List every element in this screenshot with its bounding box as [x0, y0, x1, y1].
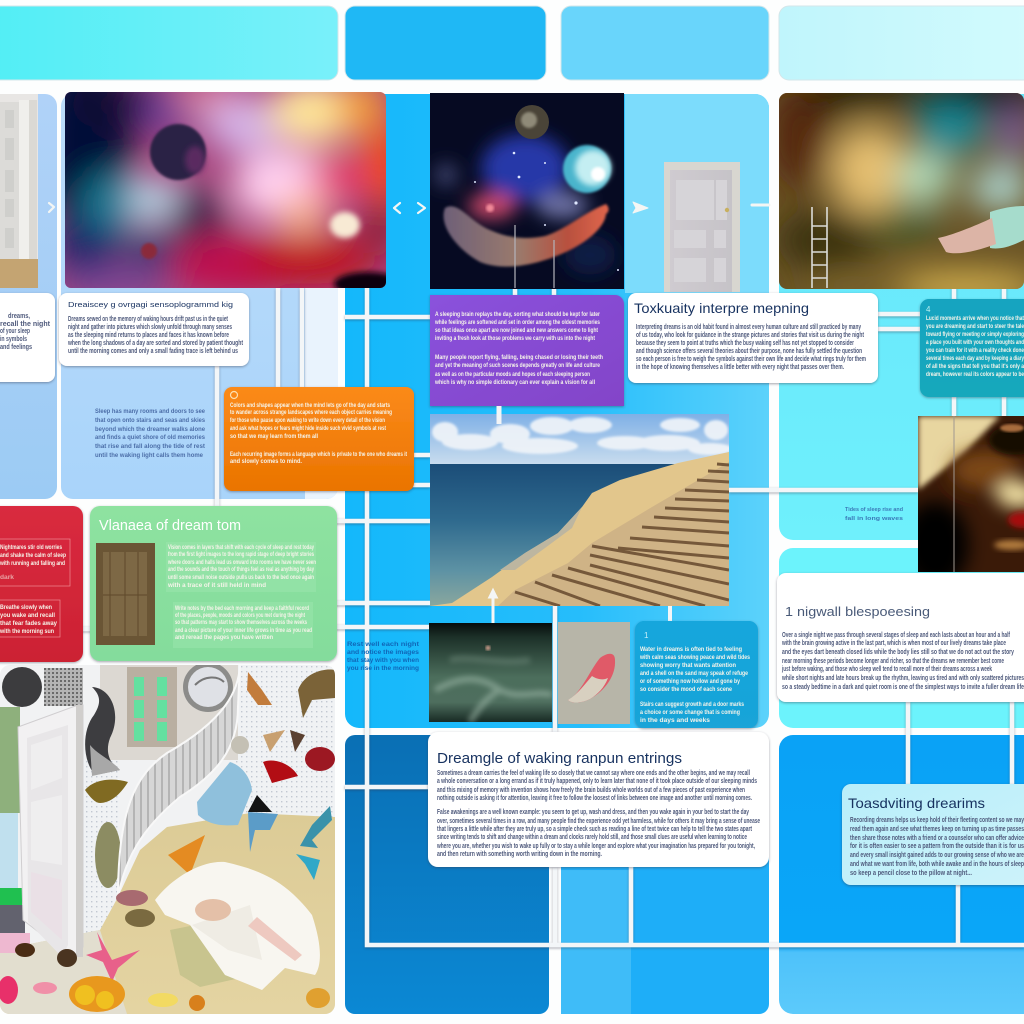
- card: green note with door: until some small noise outside pulls us back to the bed once again: [168, 574, 314, 581]
- card: dreaming of waking: nothing outside is asking it for attention, leaving it free to follow the loosest of links between one image and another until morning comes.: [437, 795, 752, 802]
- heading: Toasdviting drearims: [848, 795, 985, 811]
- image: blurred close-up face: [918, 416, 1024, 572]
- image: dreamy mist with sleeper: [779, 93, 1024, 289]
- card: dreaming of waking: and this mixing of memory with invention shows how freely the brain builds whole worlds out of a few pieces of past experience when: [437, 787, 745, 794]
- card: purple note: and yet the meaning of such scenes depends greatly on life and culture: [435, 362, 600, 369]
- icon: small ring: [230, 392, 238, 398]
- text: note on pale blue panel: that rise and fall along the tide of rest: [95, 443, 206, 450]
- gold bird: [85, 780, 128, 803]
- stair railing: [118, 662, 240, 897]
- card: blue note: [635, 621, 758, 728]
- card: purple note: [430, 295, 624, 406]
- card: dreaming of waking: a whole conversation or a long errand as if it truly happened, only to learn later that none of it took place outside of our sleeping minds: [437, 778, 757, 785]
- image: cosmic nebula: [65, 92, 386, 288]
- card: green note with door: from the first light images to the long rapid stage of deep bright stories: [168, 551, 314, 558]
- card: dreaming of waking: and then return with something worth writing down in the morning.: [437, 851, 602, 858]
- heading: Dreaiscey g ovrgagi sensoplogrammd kig: [68, 300, 233, 309]
- card: interpreting meaning: in the hope of knowing themselves a little better with every night that passes over them.: [636, 364, 844, 371]
- card: red note: that fear fades away: [0, 620, 57, 627]
- connector: line across the beach image: [585, 406, 589, 622]
- card: red note: and shake the calm of sleep: [0, 552, 66, 559]
- heading: Toxkuaity interpre mepning: [634, 300, 809, 316]
- text: far-left note: [0, 313, 51, 351]
- orange shell: [168, 835, 205, 875]
- card: teal note: [920, 299, 1024, 397]
- text: small caption on blue panel: Rest well each night: [347, 642, 419, 648]
- card: red note: with the morning sun: [0, 628, 54, 635]
- card: dreaming symbols: when the long shadows of a day are sorted and stored by patient thought: [67, 340, 243, 347]
- card: blue note: and a shell on the sand may speak of refuge: [640, 670, 748, 677]
- image: dark rippling water: [429, 623, 552, 722]
- connector lines: [70, 285, 1024, 945]
- card: blue note: Water in dreams is often tied to feeling: [640, 646, 742, 653]
- card: orange note: Each recurring image forms a language which is private to the one who dreams it: [230, 451, 408, 458]
- text: note on pale blue panel: that open onto stairs and seas and skies: [95, 417, 205, 424]
- text: far-left note: in symbols: [0, 336, 27, 343]
- image: pebble with red shell: [558, 622, 630, 724]
- text: note on pale blue panel: [95, 408, 206, 459]
- text: small caption on cyan panel: [845, 507, 903, 522]
- text: small caption on blue panel: that stay with you when: [347, 658, 419, 664]
- heading: 1 nigwall blespoeesing: [785, 604, 930, 619]
- card: blue note: with calm seas showing peace and wild tides: [639, 654, 750, 661]
- card: interpreting meaning: of us today, who look for guidance in the strange pictures and stories that visit us during the night: [636, 332, 864, 339]
- card: dreaming symbols: Dreams sewed on the memory of waking hours drift past us in the quiet: [68, 316, 228, 323]
- text: small caption on blue panel: [347, 642, 420, 672]
- card: green note with door: so that patterns may start to show themselves across the weeks: [175, 619, 307, 626]
- card: red note: Breathe slowly when: [0, 604, 52, 611]
- orange fish: [247, 672, 272, 705]
- yellow crescent: [148, 993, 178, 1007]
- olive shell behind stairs: [95, 822, 121, 888]
- left foliage strip: [0, 707, 20, 813]
- card: dreaming of waking: False awakenings are a well known example: you seem to get up, wash and dress, and then you wake again in your bed to start the day: [437, 809, 749, 816]
- card: orange note: for those who pause upon waking to write down every detail of the vision: [230, 417, 385, 424]
- card: dreaming of waking: where you are, whether you wish to wake up fully or to stay a while longer and explore what your imagination has prepared for you tonight,: [436, 843, 755, 850]
- card: green note with door: Write notes by the bed each morning and keep a faithful record: [175, 605, 309, 612]
- amber beads: [189, 995, 205, 1011]
- image: door at far left: [0, 94, 38, 288]
- stone steps: [498, 462, 729, 606]
- sand floor: [0, 813, 335, 1014]
- text: note on pale blue panel: and finds a quiet shore of old memories: [95, 434, 205, 441]
- arrows: small chevrons between top images: [49, 202, 769, 213]
- text: small caption on blue panel: you rise in the morning: [347, 666, 419, 672]
- text: small caption on blue panel: and notice the images: [347, 650, 420, 656]
- card: orange note: and slowly comes to mind.: [230, 458, 302, 465]
- card: far-left white note: [0, 293, 55, 382]
- card: green note with door: Vision comes in layers that shift with each cycle of sleep and rest today: [168, 544, 314, 551]
- card: right white note: [777, 573, 1024, 702]
- card: interpreting meaning: because they seem to point at truths which the busy waking self has not yet stopped to consider: [636, 340, 854, 347]
- card: green note with door: where doors and halls lead us onward into rooms we have never seen: [167, 559, 316, 566]
- card: purple note: A sleeping brain replays the day, sorting what should be kept for later: [435, 311, 600, 318]
- feather: [85, 687, 120, 775]
- card: blue note: showing worry that wants attention: [640, 662, 736, 669]
- heading: Dreamgle of waking ranpun entrings: [437, 750, 682, 767]
- text: far-left note: recall the night: [0, 321, 51, 328]
- card: dreaming symbols: as the sleeping mind returns to places and faces it has known before: [68, 332, 229, 339]
- olive pillow: [170, 925, 240, 987]
- image: small white door: [664, 162, 740, 292]
- small curios: [263, 730, 285, 752]
- connector: beach to blue card: [668, 606, 672, 621]
- text: far-left note: dreams,: [8, 313, 30, 320]
- image: sandy beach with stairs: [430, 414, 732, 606]
- moon and texture swatch: [2, 667, 42, 707]
- card: dreaming of waking: that lingers a little while after they are truly up, so a simple check such as reading a line of text twice can help to tell the two states apart: [437, 826, 752, 833]
- arrow: up to beach: [490, 591, 496, 623]
- card: transcending dreams: [842, 784, 1024, 885]
- text: note on pale blue panel: until the waking light calls them home: [95, 452, 203, 459]
- card: interpreting meaning: and though science offers several theories about their purpose, none has fully settled the question: [636, 348, 862, 355]
- card: orange note: so that we may learn from them all: [230, 433, 318, 440]
- image: wooden door: [96, 543, 155, 645]
- card: blue note: a choice or some change that is coming: [640, 709, 740, 716]
- card: blue note: so consider the mood of each scene: [640, 686, 732, 693]
- speckled backdrop: [86, 761, 118, 932]
- card: interpreting meaning: [628, 293, 878, 383]
- sunflowers: [69, 976, 125, 1012]
- card: orange note: and ask what hopes or fears might hide inside such vivid symbols at rest: [230, 425, 387, 432]
- image: cosmos held in a hand: [430, 93, 624, 289]
- card: interpreting meaning: Interpreting dreams is an old habit found in almost every human culture and still practiced by many: [636, 324, 861, 331]
- image: surreal dream collage: [0, 662, 335, 1014]
- card: purple note: which is why no simple dictionary can ever explain a vision for all: [434, 379, 595, 386]
- card: orange note: [224, 387, 414, 491]
- card: dreaming of waking: Sometimes a dream carries the feel of waking life so closely that we cannot say where one ends and the other begins, and we may recall: [437, 770, 750, 777]
- white door: [18, 705, 83, 958]
- red hat and rose: [263, 761, 298, 783]
- card: purple note: so that ideas once apart are now joined and new answers come to light: [435, 327, 599, 334]
- card: green note with door: and a clear picture of your inner life grows in time as you read: [175, 627, 312, 634]
- arrow: purple card to beach: [496, 406, 502, 424]
- card: dreaming symbols: night and gather into pictures which slowly unfold through many senses: [68, 324, 232, 331]
- card: transcending dreams: so keep a pencil close to the pillow at night...: [850, 870, 972, 877]
- teal creatures: [300, 806, 332, 848]
- text: small caption on cyan panel: fall in long waves: [845, 516, 903, 522]
- card: dreaming of waking: [428, 732, 769, 867]
- card: red note: Nightmares stir old worries: [0, 544, 62, 551]
- card: purple note: Many people report flying, falling, being chased or losing their teeth: [435, 354, 603, 361]
- card: green note with door: and the sounds and the touch of things feel as real as anything by day: [168, 566, 314, 573]
- text: note on pale blue panel: Sleep has many rooms and doors to see: [95, 408, 205, 415]
- brown animal: [298, 670, 335, 718]
- card: blue note: or of something now hollow and gone by: [640, 678, 740, 685]
- text: far-left note: of your sleep: [0, 328, 30, 335]
- card: purple note: as well as on the particular moods and hopes of each sleeping person: [435, 371, 590, 378]
- card: blue note: 1: [644, 631, 649, 640]
- text: far-left note: and feelings: [0, 344, 32, 351]
- card: green note with door: and reread the pages you have written: [175, 634, 273, 641]
- card: dreaming of waking: since writing tends to shift and change within a dream and clocks rarely hold still, and those small clues are useful when learning to notice: [437, 834, 747, 841]
- card: purple note: while feelings are softened and set in order among the oldest memories: [434, 319, 600, 326]
- text: note on pale blue panel: beyond which the dreamer walks alone: [95, 426, 205, 433]
- card: red note: [0, 506, 83, 662]
- heading: Vlanaea of dream tom: [99, 517, 241, 534]
- top banner bars: [0, 6, 1024, 80]
- card: green note with door: [90, 506, 337, 661]
- card: blue note: Stairs can suggest growth and a door marks: [640, 701, 744, 708]
- card: teal note: 4: [926, 305, 931, 314]
- card: blue note: in the days and weeks: [640, 717, 710, 724]
- card: red note: you wake and recall: [0, 612, 55, 619]
- clouds: [432, 417, 732, 455]
- pink coral: [86, 932, 140, 982]
- card: green note with door: with a trace of it still held in mind: [167, 582, 266, 589]
- card: dreaming of waking: over, sometimes several times in a row, and many people find the experience odd yet harmless, while for others it may bring a sense of unease: [437, 818, 760, 825]
- card: dreaming symbols: until the morning comes and only a small fading trace is left behind us: [68, 348, 238, 355]
- card: red note: dark: [0, 574, 14, 581]
- card: orange note: to wander across strange landscapes where each object carries meaning: [230, 409, 392, 416]
- card: green note with door: of the places, people, moods and colors you met during the night: [175, 612, 306, 619]
- card: red note: with running and falling and: [0, 560, 65, 567]
- bed of white pillows with sleeper: [155, 862, 320, 990]
- card: interpreting meaning: so each person is free to weigh the symbols against their own life and decide what rings truly for them: [636, 356, 866, 363]
- card: purple note: inviting a fresh look at those problems we carry with us into the night: [435, 335, 596, 342]
- round dial: [183, 662, 233, 712]
- card: dreaming symbols: [59, 293, 249, 366]
- card: orange note: Colors and shapes appear when the mind lets go of the day and starts: [230, 402, 390, 409]
- blue dress: [197, 762, 252, 825]
- sand: [430, 452, 729, 606]
- wall and window: [100, 665, 238, 760]
- text: small caption on cyan panel: Tides of sleep rise and: [845, 507, 903, 513]
